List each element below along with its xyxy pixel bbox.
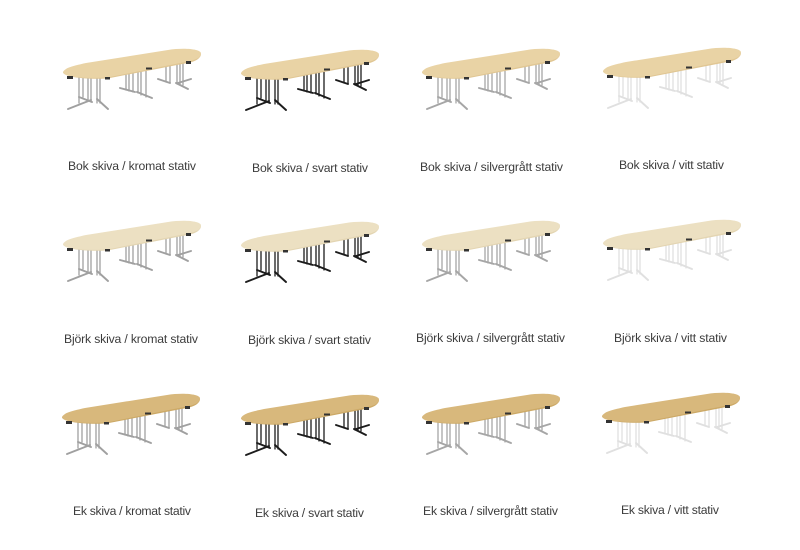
label: Ek skiva / kromat stativ (73, 504, 192, 518)
panel: Ek skiva / silvergrått stativ (422, 394, 560, 518)
label: Bok skiva / svart stativ (252, 161, 369, 175)
label: Bok skiva / vitt stativ (619, 158, 725, 172)
table: björk, svart (241, 222, 379, 282)
label: Björk skiva / kromat stativ (64, 332, 199, 346)
label: Björk skiva / silvergrått stativ (416, 331, 566, 345)
panel: Björk skiva / kromat stativ (63, 221, 201, 346)
panel: Bok skiva / svart stativ (241, 50, 379, 175)
panel: Bok skiva / vitt stativ (603, 48, 741, 172)
table: ek, kromat (62, 394, 200, 454)
label: Björk skiva / svart stativ (248, 333, 372, 347)
table: bok, svart (241, 50, 379, 110)
label: Ek skiva / svart stativ (255, 506, 365, 520)
table: björk, vitt (603, 220, 741, 280)
label: Bok skiva / kromat stativ (68, 159, 197, 173)
panel: Ek skiva / kromat stativ (62, 394, 200, 518)
panel: Bok skiva / kromat stativ (63, 49, 201, 173)
panel: Ek skiva / vitt stativ (602, 393, 740, 517)
label: Ek skiva / silvergrått stativ (423, 504, 559, 518)
table: bok, kromat (63, 49, 201, 109)
table: bok, silvergrått (422, 49, 560, 109)
panel: Björk skiva / vitt stativ (603, 220, 741, 345)
label: Bok skiva / silvergrått stativ (420, 160, 564, 174)
table: bok, vitt (603, 48, 741, 108)
panel: Bok skiva / silvergrått stativ (420, 49, 564, 174)
table: björk, kromat (63, 221, 201, 281)
table: ek, vitt (602, 393, 740, 453)
panel: Björk skiva / svart stativ (241, 222, 379, 347)
label: Björk skiva / vitt stativ (614, 331, 728, 345)
panel: Björk skiva / silvergrått stativ (416, 221, 566, 345)
panel: Ek skiva / svart stativ (241, 395, 379, 520)
label: Ek skiva / vitt stativ (621, 503, 720, 517)
table: ek, svart (241, 395, 379, 455)
table: ek, silvergrått (422, 394, 560, 454)
table: björk, silvergrått (422, 221, 560, 281)
